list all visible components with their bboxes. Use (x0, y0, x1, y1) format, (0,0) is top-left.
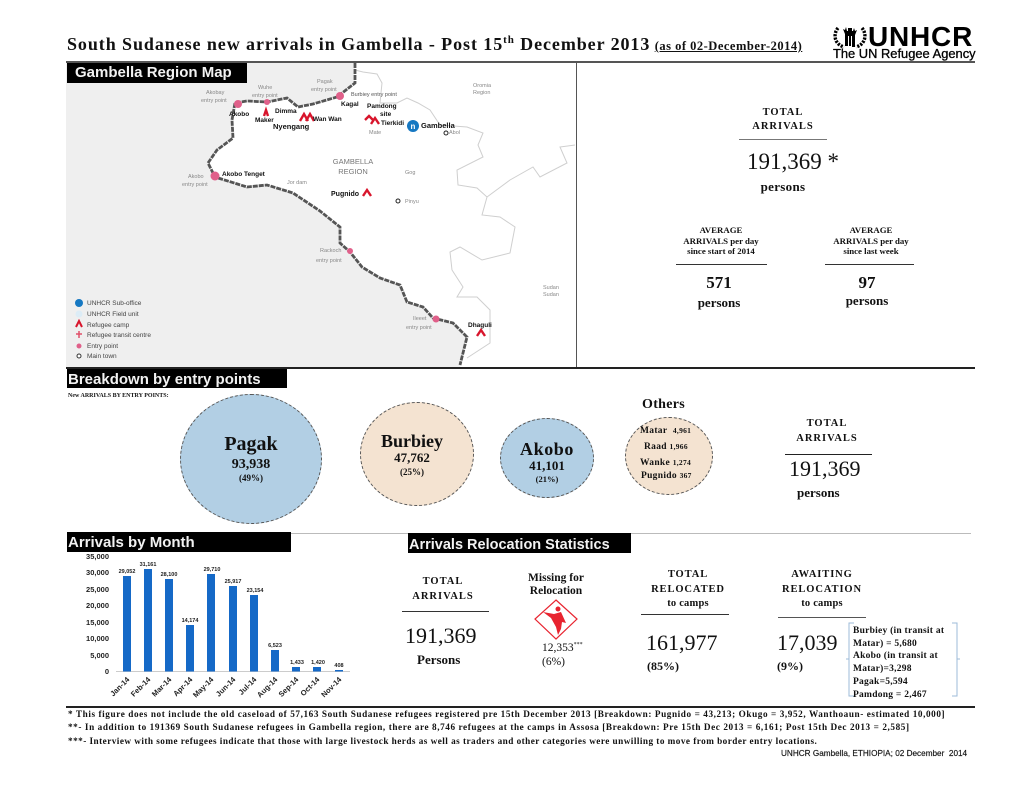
map: grey annotations: Rackoch (320, 248, 341, 254)
stat: average since last week: AVERAGE (850, 225, 892, 235)
map: place labels: Akobo Tenget (222, 171, 266, 178)
source line: UNHCR Gambella, ETHIOPIA; 02 December 2014 (781, 749, 967, 758)
bubble: Others (625, 417, 713, 495)
month labels: Aug-14 (255, 674, 280, 699)
stat: total relocated: to camps (667, 598, 709, 609)
bubble: Others: Wanke 1,274 (640, 458, 691, 468)
map: grey annotations: Ileeet (413, 316, 427, 322)
map: grey annotations: Region (473, 90, 490, 96)
heading: total arrivals (752, 107, 814, 132)
title: South Sudanese new arrivals in Gambella - Post 15th December 2013 (as of 02-December-2014) (67, 34, 802, 54)
value labels: 23,154 (247, 588, 264, 594)
stat: missing for relocation: Relocation (530, 585, 582, 597)
stat: awaiting relocation: to camps (801, 598, 843, 609)
value labels: 408 (334, 663, 344, 669)
stat: total relocated: (85%) (647, 659, 679, 673)
panel: total arrivals by entry point (785, 418, 872, 500)
month labels: May-14 (191, 674, 216, 699)
footnotes (68, 709, 945, 746)
y axis labels: 20,000 (86, 601, 109, 610)
stat: average since start of 2014: persons (698, 295, 740, 310)
logo: UNHCR: The UN Refugee Agency (833, 46, 976, 61)
stat: total relocated: 161,977 (646, 630, 718, 655)
stat: awaiting relocation: AWAITING (791, 569, 853, 580)
map: grey annotations: entry point (311, 87, 337, 93)
stat: awaiting relocation: (9%) (777, 659, 803, 673)
map: grey annotations: Mate (369, 130, 381, 136)
map: grey annotations: Gog (405, 170, 415, 176)
footnotes: * This figure does not include the old caseload of 57,163 South Sudanese refugees registered pre 15th December 2013 [Breakdown: Pugnido = 43,213; Okugo = 3,952, Wanthoaun- estimated 10,000] (68, 709, 945, 719)
bubble: Pagak: Pagak (224, 433, 278, 455)
y axis labels: 0 (105, 667, 109, 676)
value labels: 1,420 (311, 660, 325, 666)
heading: total arrivals: TOTAL (763, 107, 803, 118)
map legend: Entry point (87, 343, 118, 350)
map: grey annotations: entry point (201, 98, 227, 104)
map: grey annotations: Abol (449, 130, 460, 136)
heading: Arrivals Relocation Statistics: Arrivals Relocation Statistics (409, 537, 610, 553)
heading: total arrivals: ARRIVALS (752, 120, 814, 132)
callout: awaiting relocation breakdown: Matar)=3,298 (853, 664, 912, 674)
panel: Gambella region map (66, 63, 575, 367)
stat: awaiting relocation: RELOCATION (782, 584, 862, 594)
y axis labels (86, 552, 109, 676)
callout: awaiting relocation breakdown (846, 622, 960, 700)
map: grey annotations: Pinyu (405, 199, 419, 205)
map: place labels: Pamdong (367, 103, 397, 110)
map: place labels: Akobo (229, 111, 249, 118)
map: place labels: Pugnido (331, 191, 359, 198)
icon: running person warning (534, 599, 578, 640)
value labels: 25,917 (225, 579, 241, 585)
map: place labels: Gambella (421, 121, 456, 130)
y axis labels: 30,000 (86, 568, 109, 577)
stat: average since last week: since last week (843, 246, 899, 256)
bubble: Akobo: Akobo (520, 439, 574, 459)
panel: total arrivals by entry point: TOTAL (807, 418, 847, 429)
map: place labels: Dhaguli (468, 322, 492, 329)
map: grey annotations: Akobo (188, 174, 204, 180)
stat: total arrivals: TOTAL (423, 576, 463, 587)
heading: Breakdown by entry points: Breakdown by entry points (68, 371, 261, 388)
bubble: Pagak: 93,938 (232, 457, 270, 472)
month labels: Apr-14 (171, 674, 195, 698)
map: international border (208, 63, 467, 365)
bar chart: arrivals by month (86, 552, 350, 699)
map legend: Refugee transit centre (87, 332, 151, 339)
stat: awaiting relocation (777, 569, 866, 673)
footnotes: ***- Interview with some refugees indicate that those with large livestock herds as well as traders and other categories were unwilling to move from border entry locations. (68, 736, 817, 746)
map: grey annotations: Sudan (543, 285, 559, 291)
panel: total arrivals by entry point: 191,369 (789, 456, 860, 481)
map: place labels: Maker (255, 117, 274, 124)
y axis labels: 5,000 (90, 651, 109, 660)
stat: total relocated: TOTAL (668, 569, 708, 580)
value labels: 1,433 (290, 660, 304, 666)
panel: total arrivals by entry point: ARRIVALS (796, 432, 858, 444)
map: region name (333, 157, 373, 176)
map: UNHCR office (407, 120, 419, 132)
value labels: 29,052 (119, 569, 135, 575)
heading: Gambella Region Map: Gambella Region Map (75, 64, 232, 81)
map legend: UNHCR Sub-office (87, 300, 142, 307)
callout: awaiting relocation breakdown: Burbiey (in transit at (853, 626, 944, 636)
value labels (119, 562, 344, 669)
stat: missing for relocation: Missing for (528, 572, 584, 584)
panel: total arrivals headline (676, 107, 914, 310)
stat: total relocated: RELOCATED (651, 584, 725, 594)
stat: missing for relocation (528, 572, 584, 668)
month labels: Jul-14 (237, 674, 259, 697)
heading: Arrivals by Month: Arrivals by Month (68, 534, 195, 551)
map: place labels: Nyengang (273, 122, 310, 131)
month labels (108, 674, 344, 699)
map: grey annotations: Pagak (317, 79, 333, 85)
stat: total arrivals: 191,369 (405, 623, 476, 648)
callout: awaiting relocation breakdown: Pamdong = 2,467 (853, 690, 927, 700)
number: 191,369: 191,369 * (747, 149, 839, 174)
map: grey annotations: entry point (182, 182, 208, 188)
bubble: Pagak: (49%) (239, 473, 263, 483)
month labels: Nov-14 (319, 674, 344, 699)
heading: Others: Others (642, 397, 685, 412)
map: region boundaries (355, 70, 575, 358)
y axis labels: 15,000 (86, 618, 109, 627)
stat: average since last week: ARRIVALS per day (833, 236, 909, 246)
stat: total arrivals (402, 576, 489, 667)
value labels: 28,100 (161, 572, 177, 578)
callout: awaiting relocation breakdown: Akobo (in transit at (853, 651, 938, 661)
callout: awaiting relocation breakdown: Matar) = 5,680 (853, 639, 917, 649)
stat: average since last week: persons (846, 293, 888, 308)
month labels: Feb-14 (129, 674, 153, 699)
bubble: Burbiey: 47,762 (394, 450, 430, 465)
callout: awaiting relocation breakdown: Pagak=5,594 (853, 677, 908, 687)
map: region name: REGION (338, 167, 368, 176)
bubble: Burbiey: (25%) (400, 467, 424, 477)
map: refugee camps (264, 110, 485, 336)
map: grey annotations: entry point (316, 258, 342, 264)
logo: UNHCR (833, 21, 976, 61)
y axis labels: 10,000 (86, 634, 109, 643)
map: grey annotations: Sudan (543, 292, 559, 298)
map: grey annotations: Akobay (206, 90, 225, 96)
stat: missing for relocation: (6%) (542, 656, 565, 668)
value labels: 29,710 (204, 567, 220, 573)
map: grey annotations: Oromia (473, 83, 492, 89)
month labels: Jan-14 (108, 674, 132, 698)
bubble: Akobo: (21%) (536, 474, 558, 484)
logo: UNHCR: UNHCR (868, 21, 973, 52)
map: place labels (222, 101, 492, 329)
unit: persons: persons (761, 179, 805, 194)
map: place labels: Kagal (341, 101, 359, 108)
map: entry points (210, 92, 440, 322)
y axis labels: 25,000 (86, 585, 109, 594)
value labels: 6,523 (268, 643, 282, 649)
stat: average since start of 2014: 571 (706, 273, 732, 292)
map legend: UNHCR Field unit (87, 311, 139, 318)
panel: total arrivals by entry point: persons (797, 485, 840, 500)
map: UNHCR office: n (411, 122, 416, 131)
bubble: Akobo (500, 418, 594, 498)
caption: new arrivals by entry points: New ARRIVALS BY ENTRY POINTS: (68, 393, 169, 399)
bars (123, 569, 343, 672)
y axis labels: 35,000 (86, 552, 109, 561)
month labels: Sep-14 (277, 674, 301, 699)
stat: average since start of 2014 (676, 225, 767, 310)
value labels: 31,161 (140, 562, 156, 568)
value labels: 14,174 (182, 618, 199, 624)
month labels: Oct-14 (299, 674, 322, 698)
map: grey annotations: Jor dam (287, 180, 307, 186)
map: grey annotations: Burbiey entry point (351, 92, 397, 98)
stat: total arrivals: Persons (417, 652, 460, 667)
bubble: Akobo: 41,101 (529, 458, 565, 473)
month labels: Jun-14 (214, 674, 238, 699)
map legend (75, 299, 151, 360)
map: place labels: Dimma (275, 108, 297, 115)
map: grey annotations: entry point (252, 93, 278, 99)
map: grey annotations: entry point (406, 325, 432, 331)
map: grey annotations: Wuhe (258, 85, 272, 91)
stat: average since start of 2014: AVERAGE (700, 225, 742, 235)
map: neighbouring territory (66, 63, 467, 367)
stat: awaiting relocation: 17,039 (777, 630, 838, 655)
map: place labels: Wan Wan (313, 116, 342, 123)
bubble: Burbiey: Burbiey (381, 431, 443, 451)
bubble: Others: Matar 4,961 (640, 426, 691, 436)
stat: average since last week (825, 225, 914, 308)
map: main town markers (396, 131, 448, 203)
bubble: Pagak (180, 394, 322, 524)
stat: average since start of 2014: since start of 2014 (687, 246, 755, 256)
bubble: Others: Raad 1,966 (644, 442, 688, 452)
month labels: Mar-14 (150, 674, 174, 699)
map: region name: GAMBELLA (333, 157, 373, 166)
stat: total relocated (641, 569, 729, 673)
heading: Arrivals by Month (67, 532, 291, 552)
bubble: Burbiey (360, 402, 474, 506)
bubble: Others: Pugnido 367 (641, 471, 692, 481)
stat: missing for relocation: 12,353*** (542, 642, 583, 654)
footnotes: **- In addition to 191369 South Sudanese refugees in Gambella region, there are 8,746 refugees at the camps in Assosa [Breakdown: Pre 15th Dec 2013 = 6,161; Post 15th Dec 2013 = 2,585] (68, 722, 910, 732)
stat: average since start of 2014: ARRIVALS per day (683, 236, 759, 246)
map: place labels: site (380, 111, 392, 118)
map legend: Refugee camp (87, 322, 130, 329)
map: place labels: Tierkidi (381, 120, 404, 127)
map: grey annotations (182, 79, 559, 331)
map legend: Main town (87, 353, 117, 360)
stat: average since last week: 97 (858, 273, 876, 292)
stat: total arrivals: ARRIVALS (412, 590, 474, 602)
